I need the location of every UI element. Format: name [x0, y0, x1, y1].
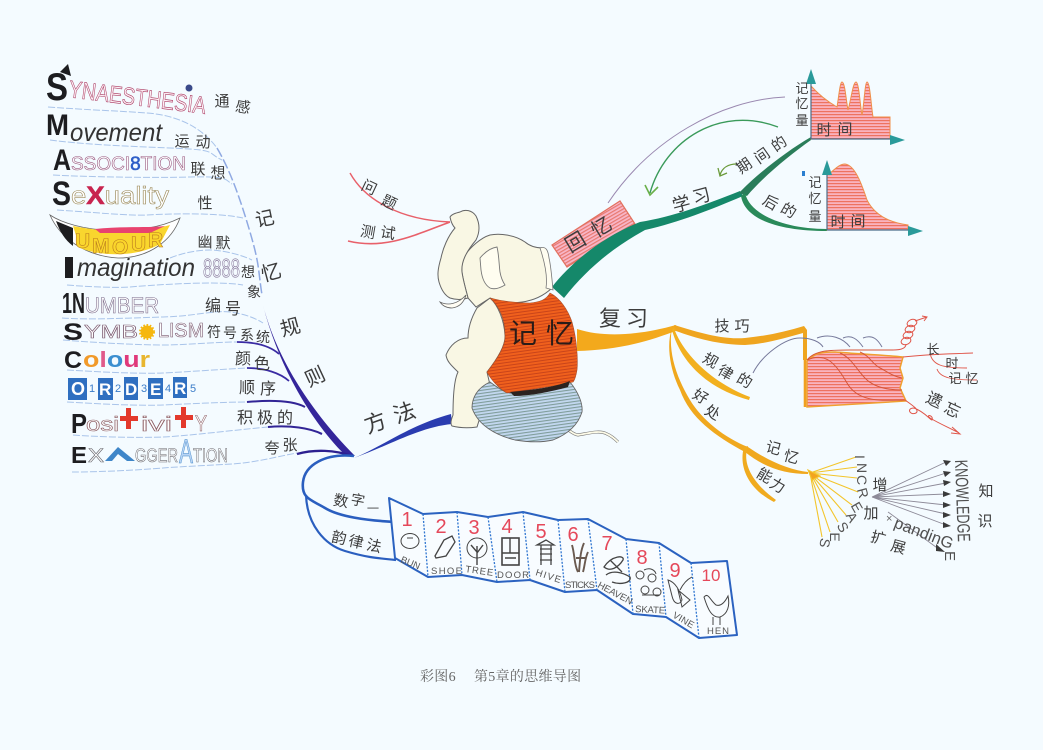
word: Movement: ovement [70, 119, 163, 147]
peg words: HEAVEN [596, 580, 634, 608]
vest label [509, 312, 574, 352]
word: Sexuality: eXuality [71, 182, 170, 210]
word: Order: 4 [165, 383, 171, 395]
peg words: TREE [465, 564, 494, 579]
panel: Chinese labels of rule list: 编 [205, 292, 221, 316]
labels: review branch: 记 [763, 436, 783, 460]
branch: questions and tests: 测 [359, 220, 377, 243]
chart: memory after learning: 忆 [808, 188, 822, 207]
branch: number rhyme system: 字 [349, 489, 366, 511]
labels: review branch [599, 301, 965, 498]
word: Exaggeration: E [71, 442, 87, 468]
panel: Chinese labels of rule list: 规 [276, 309, 303, 342]
chart: memory during learning: 时 [816, 119, 832, 140]
word: INCREASES: C [854, 475, 870, 485]
word: Number: 1N [62, 288, 85, 320]
labels: benefits: 展 [888, 535, 908, 559]
word: Colour: C [64, 347, 82, 374]
word: Order: 5 [190, 383, 196, 395]
labels: benefits: 扩 [868, 526, 888, 550]
panel: Chinese labels of rule list: 象 [247, 282, 261, 302]
elephant trunk [438, 210, 479, 300]
peg words: BUN [399, 555, 422, 572]
word: Positivity: P [71, 408, 87, 439]
chart: memory after learning: 时 [830, 211, 846, 232]
far ear [540, 247, 553, 290]
word: Order: D [125, 380, 137, 399]
word: KNOWLEDGE: KNOWLEDGE [951, 459, 974, 542]
word: Symbolism: S [63, 319, 83, 346]
panel: Chinese labels of rule list: 默 [215, 232, 231, 253]
panel: Chinese labels of rule list: 联 [190, 158, 206, 179]
labels: recall branch: 的 [777, 197, 801, 223]
word: Order: O [71, 379, 85, 399]
word: Association: A [53, 144, 71, 177]
peg words: VINE [670, 610, 696, 631]
branch: number rhyme system: — [367, 497, 379, 517]
chart: memory during learning: 忆 [795, 93, 809, 112]
panel: Chinese labels of rule list: 号 [223, 323, 237, 343]
peg words: STICKS [565, 580, 595, 591]
labels: review branch: 技 [714, 315, 730, 336]
word: Order: 2 [115, 383, 121, 395]
branch: method [354, 393, 452, 458]
word: Order: R [174, 379, 186, 398]
labels: review branch: 习 [626, 301, 648, 333]
chart: memory during learning: 间 [837, 118, 853, 139]
panel: Chinese labels of rule list: 号 [225, 295, 241, 319]
peg words: HIVE [534, 567, 562, 586]
word: Synaesthesia [46, 64, 208, 120]
caption: 彩图6 [420, 670, 456, 685]
labels: recall branch: 学 [669, 188, 693, 218]
word: Imagination: 8888 [203, 253, 240, 283]
word: Exaggeration: GGER [135, 446, 178, 467]
chart: memory during learning: 量 [795, 110, 809, 129]
label: recall: 回 [559, 223, 591, 258]
elephant head [462, 234, 552, 307]
arrows: long term memory and forgetting: 忆 [965, 368, 979, 387]
arrows: long term memory and forgetting: 长 [926, 339, 940, 358]
word: Association: SSOCI8TION [71, 154, 186, 175]
labels: recall branch: 后 [759, 189, 783, 215]
chart: memory after learning: 量 [808, 206, 822, 225]
word: Humour in a mouth: U [75, 230, 90, 253]
chart: memory during learning: 记 [795, 78, 809, 97]
panel: Chinese labels of rule list: 统 [256, 327, 270, 347]
labels: recall branch [669, 131, 801, 223]
word: INCREASES: N [854, 463, 870, 473]
branch: method: 方 [359, 403, 391, 440]
word: Colour [64, 347, 151, 374]
panel: Chinese labels of rule list: 色 [254, 350, 270, 374]
word: expanding [886, 513, 958, 561]
word: expanding: pandinG [892, 515, 956, 553]
word: Sexuality: S [52, 175, 71, 213]
arrows: recall cycle [608, 97, 785, 203]
peg icons [401, 534, 729, 625]
labels: recall branch: 习 [689, 180, 713, 210]
branch: number rhyme system [303, 456, 400, 560]
word: Symbolism: LISM [158, 320, 204, 342]
panel: rule list separators and main branch [48, 107, 355, 472]
panel: Chinese labels of rule list [174, 90, 330, 458]
vest label: 忆 [546, 312, 574, 352]
branch: questions and tests [348, 173, 450, 244]
word: Order [68, 377, 196, 400]
panel: SMASHIN SCOPE word list [46, 64, 240, 471]
word: Exaggeration: X [88, 446, 104, 467]
word: Order: 1 [89, 383, 95, 395]
word: Imagination [65, 253, 240, 283]
arrows: long term memory and forgetting: 记 [948, 368, 962, 387]
word: Movement [46, 109, 163, 147]
branch: recall green tree [552, 137, 827, 298]
labels: review branch: 忘 [941, 394, 965, 423]
labels: benefits: 识 [977, 510, 993, 531]
chart: memory after learning [802, 160, 923, 236]
word: Symbolism: YMB [84, 322, 138, 342]
ear [480, 247, 505, 289]
word: Symbolism [63, 319, 204, 346]
labels: review branch: 忆 [781, 445, 801, 469]
peg numbers: 9 [669, 560, 681, 582]
arrows: knowledge rays [872, 460, 951, 552]
labels: review branch: 处 [701, 399, 725, 425]
elephant body and arm [446, 298, 505, 428]
peg numbers: 10 [702, 566, 720, 585]
peg numbers: 3 [468, 517, 480, 539]
branch: method: 法 [388, 393, 420, 430]
word: Association [53, 144, 186, 177]
labels: recall branch: 的 [767, 131, 791, 156]
panel: Chinese labels of rule list: 想 [210, 162, 226, 183]
peg words: DOOR [497, 570, 529, 581]
peg words: SHOE [431, 566, 462, 577]
vest [487, 293, 577, 393]
panel: Chinese labels of rule list: 记 [252, 202, 277, 233]
labels: review branch: 好 [689, 383, 713, 409]
chart: spaced repetition curves [753, 336, 906, 407]
panel: Chinese labels of rule list: 颜 [235, 345, 251, 369]
panel: Chinese labels of rule list: 符 [207, 322, 221, 342]
rays: increases [808, 457, 858, 537]
branch: number rhyme system: 数 [332, 489, 350, 512]
word: Positivity [71, 407, 207, 439]
word: Humour in a mouth: M [92, 235, 110, 258]
labels: benefits [863, 474, 994, 559]
labels: benefits: 增 [872, 474, 888, 495]
peg numbers: 6 [567, 524, 579, 546]
word: INCREASES: E [827, 532, 843, 542]
labels: benefits: 知 [978, 480, 994, 501]
labels: review branch: 能 [753, 462, 777, 488]
box: recall [552, 201, 635, 267]
word: Imagination: magination [77, 254, 195, 282]
word: Humour in a mouth: O [112, 236, 128, 259]
word: expanding: × [886, 513, 892, 525]
word: Movement: M [46, 109, 69, 142]
word: Number [62, 288, 159, 320]
trousers [472, 382, 582, 442]
word: Humour in a mouth: U [131, 233, 146, 256]
word: Positivity: ivi [141, 414, 172, 436]
word: Colour: olour [83, 347, 151, 372]
peg numbers: 8 [636, 547, 648, 569]
labels: recall branch: 期 [732, 153, 756, 178]
branch: questions and tests: 题 [378, 189, 401, 215]
chart: memory after learning: 记 [808, 172, 822, 191]
word: Number: UMBER [85, 293, 159, 318]
panel: Chinese labels of rule list: 则 [299, 358, 330, 393]
word: Synaesthesia: S [46, 66, 68, 109]
panel: Chinese labels of rule list: 性 [197, 192, 213, 213]
word: Positivity: Y [195, 411, 207, 436]
branch: questions and tests: 试 [379, 221, 397, 244]
panel: Chinese labels of rule list: 忆 [257, 254, 284, 287]
branch: number rhyme system: 法 [365, 534, 384, 557]
panel: Chinese labels of rule list: 系 [240, 325, 254, 345]
panel: Chinese labels of rule list: 顺 [239, 374, 255, 398]
labels: benefits: 加 [863, 502, 879, 523]
panel: Chinese labels of rule list: 通 [214, 90, 230, 111]
labels: review branch: 复 [599, 301, 621, 333]
word: INCREASES [816, 455, 872, 549]
word: Exaggeration [71, 433, 228, 471]
branch: number rhyme system: 韵 [330, 526, 349, 549]
panel: Chinese labels of rule list: 动 [195, 131, 211, 152]
word: INCREASES: S [816, 537, 834, 549]
word: Order: 3 [141, 383, 147, 395]
panel: Chinese labels of rule list: 的 [277, 404, 293, 428]
vest label: 记 [509, 312, 537, 352]
tail [560, 427, 618, 442]
word: INCREASES: I [852, 455, 868, 459]
labels: review branch: 遗 [923, 384, 947, 413]
word: Humour in a mouth: R [148, 229, 163, 252]
arrows: long term memory and forgetting: 时 [945, 353, 959, 372]
peg words: SKATE [635, 604, 665, 617]
labels: recall branch: 间 [750, 143, 774, 168]
peg words [399, 555, 729, 637]
panel: Chinese labels of rule list: 想 [241, 262, 255, 282]
panel: peg word accordion [389, 498, 737, 638]
panel: Chinese labels of rule list: 幽 [197, 231, 213, 252]
chart: memory during learning [795, 69, 905, 145]
label: recall: 忆 [585, 208, 617, 243]
branch: review orange tree [577, 325, 808, 502]
word: INCREASES: R [854, 486, 872, 500]
peg numbers: 1 [401, 509, 413, 531]
panel: Chinese labels of rule list: 序 [260, 375, 276, 399]
peg numbers [401, 509, 720, 585]
peg words: HEN [707, 626, 729, 637]
tusk [440, 295, 466, 308]
panel: Chinese labels of rule list: 张 [282, 434, 298, 455]
word: Positivity: osi [86, 414, 119, 436]
panel: Chinese labels of rule list: 感 [234, 95, 252, 118]
labels: review branch: 律 [714, 359, 738, 385]
peg numbers: 7 [601, 533, 613, 555]
word: INCREASES: S [834, 519, 852, 535]
labels: review branch: 规 [699, 347, 723, 373]
peg numbers: 4 [501, 516, 513, 538]
arrows: long term memory and forgetting [893, 316, 979, 434]
peg numbers: 2 [435, 516, 447, 538]
elephant illustration [438, 210, 618, 442]
chart: memory after learning: 间 [850, 210, 866, 231]
panel: Chinese labels of rule list: 夸 [264, 437, 280, 458]
word: INCREASES: E [848, 499, 866, 515]
caption: 第5章的思维导图 [474, 668, 581, 685]
panel: Chinese labels of rule list: 运 [174, 130, 190, 151]
word: INCREASES: A [843, 509, 862, 526]
word: expanding: E [941, 551, 958, 561]
panel: Chinese labels of rule list: 极 [257, 404, 273, 428]
word: Humour in a mouth [50, 215, 180, 259]
word: Order: E [150, 380, 161, 399]
peg numbers: 5 [535, 521, 547, 543]
labels: review branch: 力 [766, 472, 790, 498]
panel: Chinese labels of rule list: 积 [237, 404, 253, 428]
word: Exaggeration: TION [193, 446, 228, 467]
labels: review branch: 巧 [734, 315, 750, 336]
labels: review branch: 的 [733, 367, 757, 393]
branch: questions and tests: 问 [358, 174, 381, 200]
word: Synaesthesia: YNAESTHESIA [67, 76, 208, 120]
belt [510, 381, 570, 396]
word: Order: R [99, 380, 111, 399]
word: Sexuality [52, 175, 170, 213]
word: Exaggeration: A [179, 433, 193, 471]
label: recall [559, 208, 617, 258]
branch: number rhyme system: 律 [347, 530, 366, 553]
